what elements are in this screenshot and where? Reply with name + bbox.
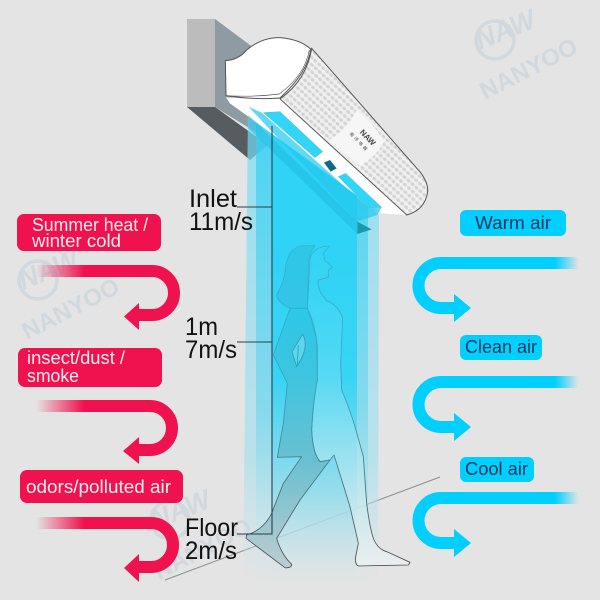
air curtain unit <box>225 38 428 234</box>
arm gap <box>292 334 305 367</box>
watermark: bottom: NANYOO <box>149 513 256 585</box>
blue arrow 3 <box>418 498 579 557</box>
watermark: bottom: NAW <box>146 483 217 536</box>
label: floor speed <box>185 514 238 565</box>
watermark: top right <box>471 3 582 105</box>
floor line <box>165 477 440 580</box>
red label: odors <box>20 470 183 503</box>
person silhouette <box>246 246 410 568</box>
red label: summer heat: Summer heat / <box>32 215 148 235</box>
label: inlet speed: 11m/s <box>189 208 253 236</box>
label: 1m speed: 1m <box>185 313 218 341</box>
outlet slit right <box>338 173 382 207</box>
red label: odors: odors/polluted air <box>26 476 171 497</box>
blue diffuser band <box>248 107 382 222</box>
watermark: left: NAW <box>14 243 85 296</box>
blue arrow 1 <box>418 263 579 322</box>
label: floor speed: Floor <box>185 514 238 542</box>
logo patch <box>329 110 384 166</box>
logo patch: 南 洋 电 器 <box>348 131 370 153</box>
blue label: warm air: Warm air <box>475 212 551 233</box>
label: inlet speed: Inlet <box>189 185 237 213</box>
watermark: bottom <box>146 483 256 585</box>
watermark: left <box>14 243 124 345</box>
logo patch: NAW <box>358 128 378 148</box>
measurement lines <box>237 126 272 534</box>
lower plate <box>248 115 357 234</box>
blue label: warm air <box>460 210 566 236</box>
body lower edge <box>280 99 407 215</box>
red label: insect dust smoke: smoke <box>27 366 79 386</box>
red label: insect dust smoke: insect/dust / <box>27 348 125 368</box>
red label: summer heat: winter cold <box>31 231 121 251</box>
end cap <box>225 38 311 99</box>
watermark: left: NANYOO <box>17 273 124 345</box>
red arrow 3 <box>36 523 173 582</box>
outlet slit left <box>263 112 323 158</box>
blue label: clean air: Clean air <box>465 336 537 357</box>
air curtain stream <box>243 106 379 585</box>
red label: summer heat <box>17 214 161 251</box>
label: 1m speed: 7m/s <box>185 336 237 364</box>
blue arrow 2 <box>418 382 579 441</box>
watermark: top right: NAW <box>471 3 542 56</box>
label: 1m speed <box>185 313 237 364</box>
label: inlet speed <box>189 185 253 236</box>
watermark: top right: NANYOO <box>475 33 582 105</box>
red arrow 2 <box>36 406 172 464</box>
unit body <box>280 48 428 215</box>
red arrow 1 <box>36 271 174 330</box>
red label: insect dust smoke <box>18 348 162 387</box>
back figure <box>246 308 330 568</box>
plate end <box>357 222 372 234</box>
wall bracket <box>187 19 268 160</box>
underside strip <box>226 97 407 215</box>
front figure <box>307 246 410 566</box>
blue label: cool air: Cool air <box>465 458 528 479</box>
control module <box>324 160 337 172</box>
hair <box>277 246 315 308</box>
label: floor speed: 2m/s <box>185 537 237 565</box>
